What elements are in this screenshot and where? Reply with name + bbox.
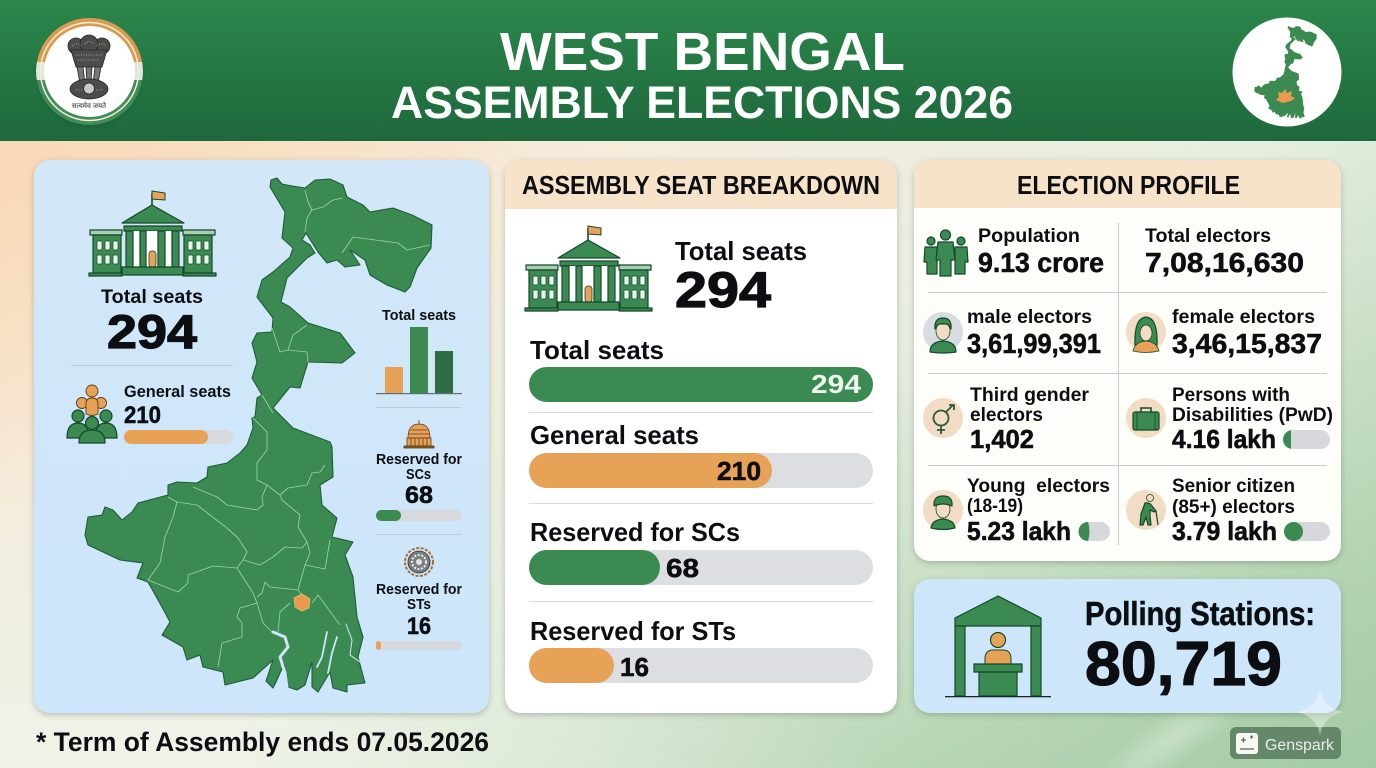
bar: reserved for STs	[529, 616, 873, 683]
heading: ASSEMBLY SEAT BREAKDOWN	[522, 172, 880, 200]
female electors: 3,46,15,837	[1172, 328, 1322, 359]
footnote: * Term of Assembly ends 07.05.2026	[36, 727, 489, 757]
reserved for SCs: 68	[405, 482, 433, 509]
mini bar chart	[376, 308, 462, 394]
persons with disabilities	[1172, 384, 1333, 454]
map of West Bengal	[85, 178, 432, 692]
persons with disabilities: Disabilities (PwD)	[1172, 404, 1333, 426]
polling stations figure	[1085, 595, 1315, 699]
bar: general seats	[529, 420, 873, 488]
bar: reserved for STs: 16	[620, 652, 649, 682]
female electors	[1172, 306, 1322, 359]
watermark: Genspark: Genspark	[1265, 737, 1334, 754]
header banner	[0, 0, 1376, 141]
population	[978, 225, 1104, 278]
icon: female elector	[1126, 312, 1166, 352]
icon: population	[924, 230, 968, 276]
general seats: 210	[124, 402, 161, 429]
population: Population	[978, 225, 1080, 247]
bar: general seats: General seats	[530, 420, 699, 450]
Kolkata marker	[294, 594, 310, 611]
icon: dome	[404, 420, 434, 448]
reserved for SCs: Reserved for	[376, 452, 462, 468]
bar: reserved for SCs: Reserved for SCs	[530, 517, 740, 547]
senior citizen electors	[1172, 475, 1330, 546]
polling stations figure: 80,719	[1085, 630, 1282, 699]
emblem motto: सत्यमेव जयते	[72, 101, 107, 110]
persons with disabilities: Persons with	[1172, 384, 1290, 406]
icon: polling booth	[945, 596, 1051, 697]
icon: assembly building	[89, 191, 216, 276]
senior citizen electors: (85+) electors	[1172, 496, 1295, 518]
reserved for SCs: SCs	[406, 467, 431, 483]
watermark: Genspark	[1230, 688, 1344, 759]
panel: state map	[34, 160, 489, 713]
icon: West Bengal map badge	[1232, 18, 1342, 126]
senior citizen electors: 3.79 lakh	[1172, 516, 1277, 546]
male electors: 3,61,99,391	[967, 328, 1101, 359]
male electors	[967, 306, 1101, 359]
reserved for STs: STs	[407, 597, 431, 613]
young electors: (18-19)	[967, 495, 1023, 517]
emblem lions	[68, 35, 110, 99]
icon: briefcase	[1126, 398, 1166, 438]
river delta	[273, 624, 360, 688]
panel: election profile	[914, 160, 1341, 561]
polling stations figure: Polling Stations:	[1085, 595, 1315, 632]
icon: chakra wheel	[405, 548, 433, 576]
general seats	[124, 382, 233, 444]
bar: reserved for SCs	[529, 517, 873, 585]
male electors: male electors	[967, 306, 1092, 328]
reserved for SCs	[376, 452, 462, 521]
bar: reserved for SCs: 68	[666, 553, 699, 583]
total figure: 294	[675, 262, 771, 318]
total electors: Total electors	[1145, 225, 1271, 247]
bar: total seats: 294	[811, 369, 862, 399]
third gender electors: 1,402	[970, 424, 1034, 454]
mini bar chart: Total seats	[382, 308, 456, 324]
bar: general seats: 210	[717, 456, 761, 486]
total electors	[1145, 225, 1304, 278]
total seats figure	[101, 286, 203, 358]
reserved for STs	[376, 582, 462, 650]
bar: reserved for STs: Reserved for STs	[530, 616, 736, 646]
icon: people group	[67, 385, 117, 443]
third gender electors	[970, 384, 1089, 454]
general seats: General seats	[124, 382, 231, 401]
icon: assembly building	[525, 226, 652, 311]
young electors	[967, 475, 1110, 546]
senior citizen electors: Senior citizen	[1172, 475, 1295, 497]
icon: male elector	[923, 312, 963, 353]
heading: ELECTION PROFILE	[1017, 172, 1240, 200]
title	[391, 22, 1013, 128]
persons with disabilities: 4.16 lakh	[1172, 424, 1276, 454]
panel: assembly seat breakdown	[505, 160, 897, 713]
female electors: female electors	[1172, 306, 1315, 328]
icon: senior citizen	[1126, 490, 1166, 530]
total figure: Total seats	[675, 236, 807, 266]
panel: polling stations	[914, 579, 1341, 713]
icon: young elector	[923, 490, 963, 530]
total seats figure: 294	[107, 305, 197, 358]
title: ASSEMBLY ELECTIONS 2026	[391, 77, 1013, 128]
total seats figure: Total seats	[101, 286, 203, 308]
young electors: 5.23 lakh	[967, 516, 1071, 546]
young electors: Young electors	[967, 475, 1110, 497]
third gender electors: Third gender	[970, 384, 1089, 406]
reserved for STs: Reserved for	[376, 582, 462, 598]
third gender electors: electors	[970, 404, 1043, 426]
icon: national emblem badge	[36, 18, 143, 125]
bar: total seats	[529, 335, 873, 402]
reserved for STs: 16	[407, 613, 431, 640]
bar: total seats: Total seats	[530, 335, 664, 365]
total figure	[675, 236, 807, 318]
title: WEST BENGAL	[500, 22, 905, 82]
icon: third gender symbol	[923, 398, 963, 438]
total electors: 7,08,16,630	[1145, 247, 1304, 278]
population: 9.13 crore	[978, 247, 1104, 278]
